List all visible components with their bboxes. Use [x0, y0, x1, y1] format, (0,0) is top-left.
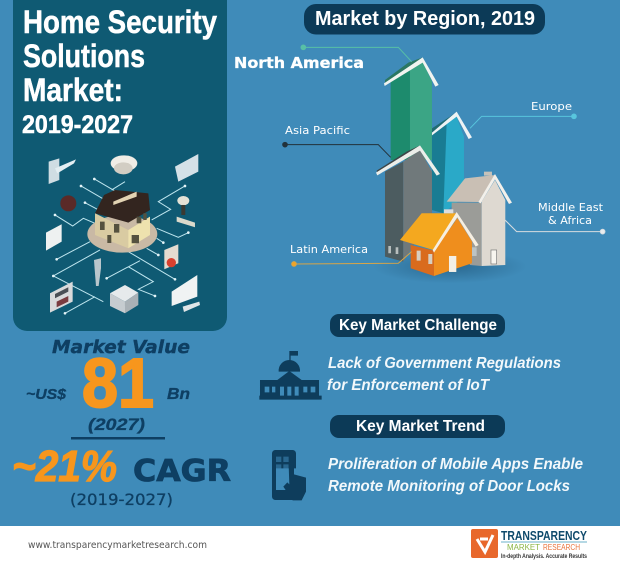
icon: wall lock: [175, 154, 198, 182]
logo: Transparency Market Research: RESEARCH: [543, 543, 580, 552]
house: Latin America: [400, 209, 479, 276]
label: Latin America: Latin America: [290, 243, 368, 256]
label: Middle East and Africa: & Africa: [548, 214, 592, 227]
icon: red sensor: [60, 195, 76, 211]
label: Europe: Europe: [531, 100, 572, 113]
device network illustration: [46, 154, 200, 315]
house: Middle East and Africa: [447, 172, 512, 266]
text: challenge description: Lack of Government Regulations: [328, 355, 561, 372]
title: Market:: [23, 72, 123, 108]
text: currency prefix: ~US$: [26, 386, 67, 403]
title: [22, 4, 217, 139]
title: Solutions: [23, 38, 145, 74]
icon: camera: [177, 196, 195, 227]
title: 2019-2027: [22, 111, 133, 139]
text: website: www.transparencymarketresearch.com: [28, 540, 207, 551]
text: currency unit: Bn: [167, 386, 190, 403]
leader line: North America: [301, 45, 412, 62]
heading: key market trend: Key Market Trend: [356, 418, 485, 435]
number: 21 percent: ~21%: [12, 442, 117, 491]
house: Asia Pacific: [376, 145, 440, 262]
heading: market by region: Market by Region, 2019: [315, 8, 535, 30]
heading: key market trend: [330, 415, 505, 438]
title: Home Security: [23, 4, 217, 40]
logo: Transparency Market Research: MARKET: [507, 543, 540, 552]
icon: house on platform: [87, 190, 157, 253]
CAGR block: [12, 442, 231, 509]
text: year 2027: (2027): [88, 415, 145, 434]
heading: key market challenge: Key Market Challenge: [339, 317, 497, 334]
text: forecast period: (2019-2027): [70, 490, 173, 509]
text: trend description: [328, 456, 583, 495]
leader line: Latin America: [292, 252, 412, 266]
house: North America: [384, 57, 439, 160]
leader line: Middle East and Africa: [505, 220, 605, 234]
icon: safe: [110, 285, 138, 313]
heading: market value: Market Value: [52, 337, 190, 358]
icon: door handle: [49, 158, 76, 184]
icon: government building: [259, 351, 322, 400]
icon: smoke detector: [111, 155, 137, 174]
label: Asia Pacific: Asia Pacific: [285, 124, 350, 137]
icon: alarm panel: [46, 224, 62, 251]
text: trend description: Remote Monitoring of Door Locks: [328, 478, 570, 495]
panel: title and devices: [13, 0, 227, 331]
text: trend description: Proliferation of Mobile Apps Enable: [328, 456, 583, 473]
logo: Transparency Market Research: In-depth Analysis. Accurate Results: [501, 554, 588, 560]
leader line: Asia Pacific: [283, 142, 391, 157]
icon: keypad: [50, 282, 73, 313]
house: Europe: [432, 112, 472, 213]
chart: houses by region: [283, 45, 605, 283]
market value block: [26, 337, 190, 440]
number: 81: 81: [82, 344, 154, 422]
label: Middle East and Africa: [538, 201, 604, 227]
icon: logo mark: [471, 529, 498, 558]
logo: Transparency Market Research: TRANSPARENCY: [501, 528, 587, 543]
heading: market by region: [304, 4, 545, 34]
icon: phone with hand: [272, 450, 306, 500]
icon: door sensor: [164, 244, 178, 269]
leader line: Europe: [470, 114, 576, 128]
logo: Transparency Market Research: [471, 528, 588, 560]
text: CAGR: CAGR: [133, 454, 231, 489]
icon: computer: [172, 275, 200, 312]
text: challenge description: [327, 355, 561, 394]
icon: key: [94, 258, 101, 286]
label: North America: North America: [234, 54, 364, 72]
label: Middle East and Africa: Middle East: [538, 201, 604, 214]
text: challenge description: for Enforcement of IoT: [327, 377, 490, 394]
